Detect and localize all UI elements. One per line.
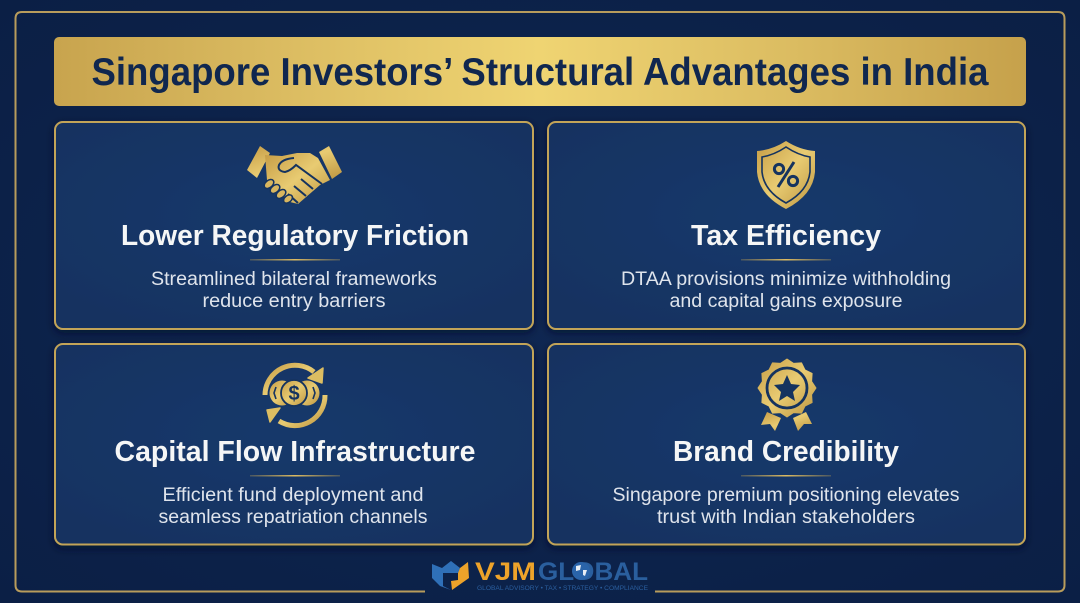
icon: shield with percent [757,141,815,209]
description: reduce entry barriers [202,291,386,312]
panel: tax efficiency [548,122,1025,329]
panel: brand credibility [548,344,1025,544]
description: trust with Indian stakeholders [657,507,915,528]
description: Streamlined bilateral frameworks [151,269,437,290]
description [612,485,960,528]
description: DTAA provisions minimize withholding [621,269,951,290]
description [151,269,437,312]
brand name: VJM [475,558,536,586]
panel: lower regulatory friction [55,122,533,329]
panel: capital flow infrastructure [55,344,533,544]
description: and capital gains exposure [670,291,902,312]
logo: VJM Global: GLOBAL [538,558,648,586]
title: Singapore Investors’ Structural Advantages in India [92,51,989,94]
heading: Lower Regulatory Friction [121,220,469,252]
description [158,485,428,528]
heading: Capital Flow Infrastructure [114,436,476,468]
icon: circulating money [265,365,325,426]
description [621,269,951,312]
icon: circulating money: $ [288,383,300,405]
description: seamless repatriation channels [158,507,428,528]
icon: globe in logo [572,562,590,580]
heading: Tax Efficiency [691,220,881,252]
tagline: GLOBAL ADVISORY • TAX • STRATEGY • COMPLIANCE [477,585,649,592]
title banner [54,37,1026,106]
icon: handshake [247,146,342,205]
logo: VJM Global [432,558,649,592]
description: Singapore premium positioning elevates [612,485,960,506]
icon: award rosette [758,359,816,431]
description: Efficient fund deployment and [162,485,424,506]
heading: Brand Credibility [673,436,899,468]
icon: logo mark [432,561,469,590]
